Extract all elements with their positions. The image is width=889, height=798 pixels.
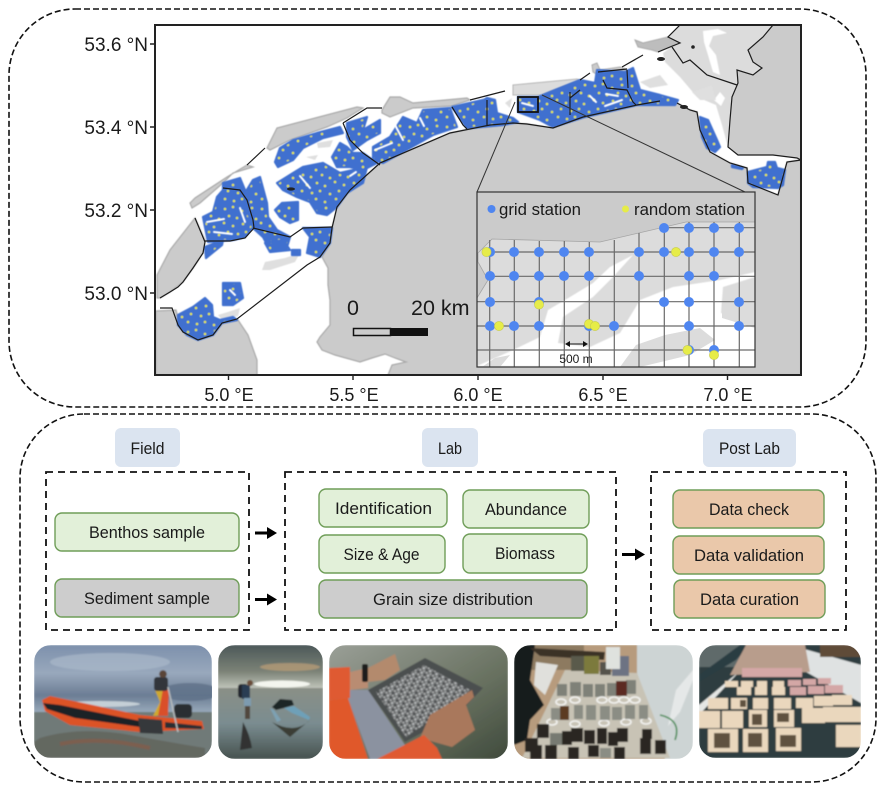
- arrow: sediment to lab: [255, 594, 277, 606]
- mainland: [317, 101, 801, 375]
- box: Size and Age: Size & Age: [344, 545, 420, 564]
- Schiermonnikoog: [513, 79, 580, 95]
- map: [155, 25, 801, 375]
- wadden tidal flat patches: [218, 75, 716, 320]
- box: Sediment sample: Sediment sample: [84, 589, 210, 608]
- inset: sampling grid: [477, 192, 755, 367]
- grid stations: [485, 223, 744, 355]
- box: Grain size distribution: Grain size distribution: [373, 590, 533, 609]
- box: Identification: Identification: [335, 499, 432, 518]
- box: Data check: [673, 490, 824, 528]
- Germany: [728, 25, 801, 160]
- latitude axis: 53.4 °N: [84, 118, 148, 139]
- lab dashed box: [285, 472, 616, 630]
- panel: study area map: [9, 9, 866, 407]
- heading: Post Lab: Post Lab: [719, 439, 780, 458]
- Terschelling: [267, 107, 363, 150]
- longitude axis: [204, 375, 753, 405]
- longitude axis: 7.0 °E: [703, 385, 753, 405]
- North Holland: [156, 310, 257, 375]
- post lab dashed box: [651, 472, 846, 630]
- inset leader lines: [477, 95, 745, 192]
- latitude axis: 53.0 °N: [84, 284, 148, 305]
- heading: Post Lab: [703, 429, 796, 467]
- 500 m spacing marker: [559, 341, 593, 366]
- box: Data curation: [674, 580, 825, 618]
- box: Biomass: [463, 534, 587, 573]
- Vlieland: [190, 165, 253, 208]
- latitude axis: 53.2 °N: [84, 201, 148, 222]
- field dashed box: [46, 472, 249, 630]
- scale bar: 20 km: [411, 296, 470, 320]
- coastline and management boundaries: [160, 25, 801, 340]
- latitude axis: 53.6 °N: [84, 35, 148, 56]
- photo: wadden fieldworkers: [218, 645, 323, 759]
- survey stations: [178, 68, 785, 340]
- photo: research boat: [34, 645, 220, 758]
- gaps in the station coverage: [207, 94, 622, 295]
- inset locator box: [518, 97, 538, 112]
- box: Abundance: Abundance: [485, 500, 567, 519]
- heading: Field: Field: [130, 439, 164, 458]
- latitude axis: [84, 35, 155, 305]
- Ameland: [382, 97, 470, 117]
- box: Size and Age: [319, 535, 445, 573]
- box: Data curation: Data curation: [700, 590, 799, 609]
- box: Grain size distribution: [319, 580, 587, 618]
- scale bar: [347, 296, 470, 336]
- longitude axis: 6.5 °E: [578, 385, 628, 405]
- box: Benthos sample: [55, 513, 239, 551]
- legend: grid station: [499, 201, 581, 219]
- legend: random station: [634, 201, 745, 219]
- legend: [488, 201, 745, 219]
- scale bar: 0: [347, 296, 359, 320]
- 500 m spacing marker: 500 m: [559, 352, 593, 366]
- box: Benthos sample: Benthos sample: [89, 523, 205, 542]
- box: Biomass: Biomass: [495, 544, 555, 563]
- Texel: [157, 218, 205, 298]
- small dark sand banks: [287, 45, 695, 191]
- longitude axis: 5.5 °E: [329, 385, 379, 405]
- panel: sampling workflow: [20, 414, 876, 782]
- heading: Lab: Lab: [438, 439, 462, 458]
- Ems tidal flats: [663, 25, 773, 147]
- photo: sieve tray with shells: [329, 645, 508, 759]
- photo: sorted samples in trays: [699, 645, 861, 758]
- Borkum: [635, 37, 680, 52]
- box: Sediment sample: [55, 579, 239, 617]
- box: Identification: [319, 489, 447, 527]
- box: Data check: Data check: [709, 500, 789, 519]
- longitude axis: 6.0 °E: [453, 385, 503, 405]
- heading: Lab: [422, 428, 478, 467]
- heading: Field: [115, 428, 180, 467]
- longitude axis: 5.0 °E: [204, 385, 254, 405]
- box: Abundance: [463, 490, 589, 528]
- arrow: lab to post lab: [622, 548, 645, 560]
- photo: sample jars on table: [514, 645, 693, 759]
- arrow: benthos to lab: [255, 527, 277, 539]
- random stations: [482, 247, 719, 360]
- box: Data validation: [673, 536, 824, 574]
- box: Data validation: Data validation: [694, 546, 804, 565]
